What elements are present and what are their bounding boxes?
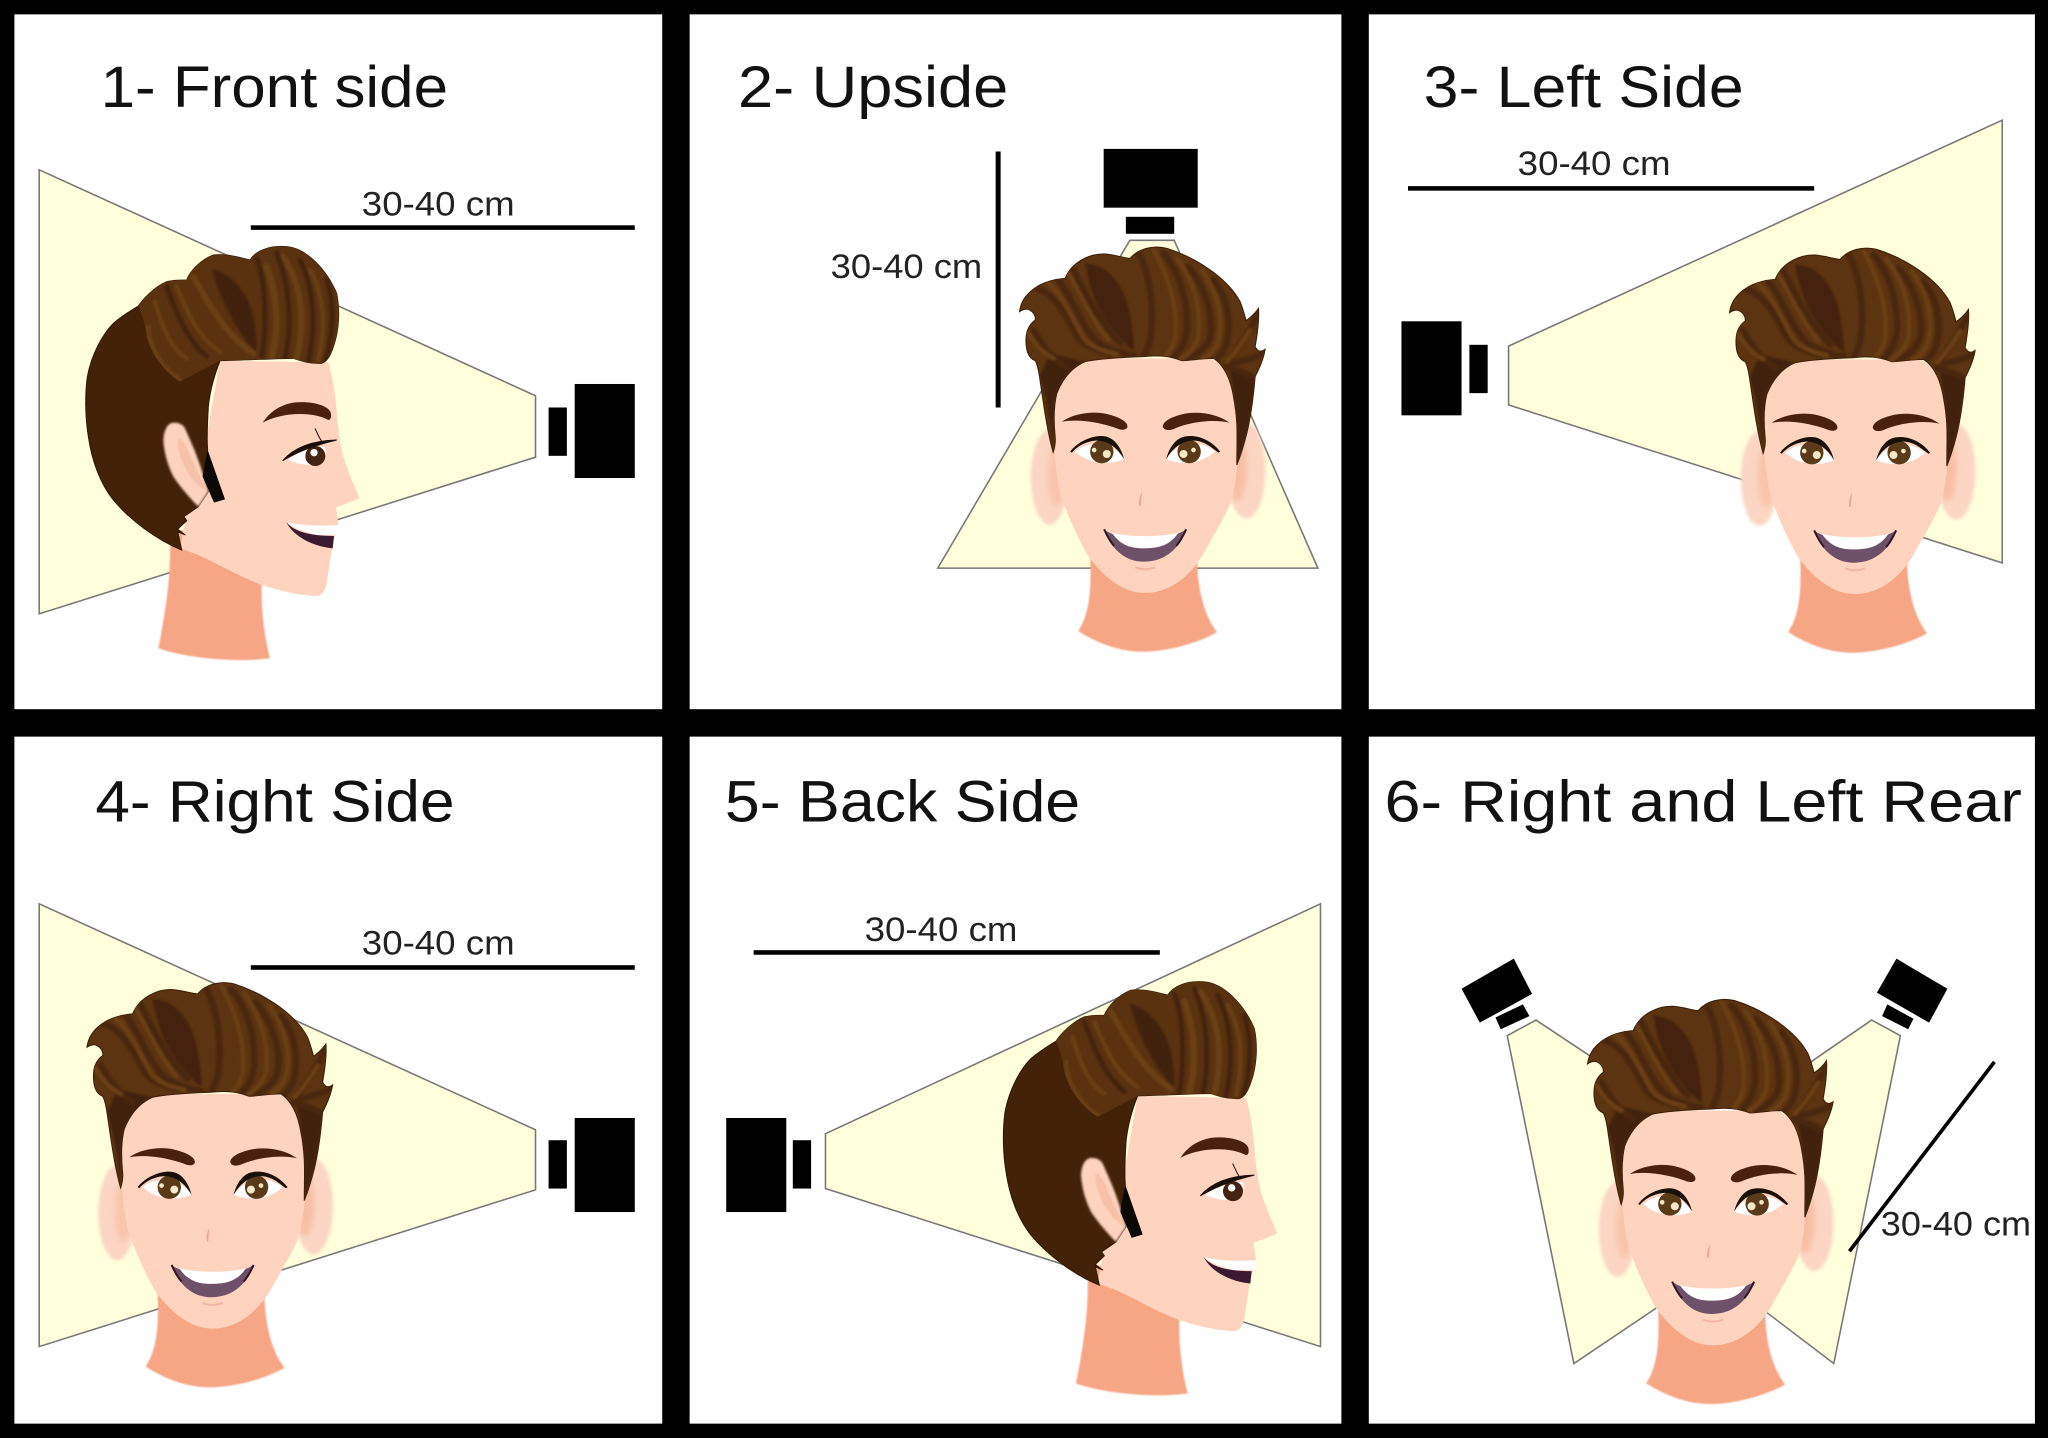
head front [1588,999,1833,1404]
head front [87,983,333,1387]
light beam [825,904,1320,1347]
panel: 5 back side [690,737,1341,1424]
distance line [996,152,1001,407]
light beam [938,240,1318,568]
head front [1729,248,1975,653]
camera [726,1118,811,1212]
distance label: 30-40 cm [831,248,982,286]
left camera [1462,959,1532,1029]
light beam [39,904,536,1347]
head profile [86,246,359,660]
camera [1104,149,1198,234]
distance label: 30-40 cm [1518,145,1671,183]
distance line [251,225,635,230]
panel: 1 front side [14,14,662,709]
panel: 4 right side [14,737,662,1424]
camera [549,384,635,478]
camera [549,1118,635,1212]
title: 1: 1- Front side [101,55,448,120]
distance label: 30-40 cm [362,925,515,963]
title: 3: 3- Left Side [1424,55,1744,120]
title: 5: 5- Back Side [725,770,1080,835]
camera [1401,321,1488,415]
distance label: 30-40 cm [362,186,515,224]
distance label: 30-40 cm [865,911,1017,949]
title: 2: 2- Upside [738,55,1008,120]
light beam [39,170,536,614]
head profile [1003,982,1277,1395]
title: 6: 6- Right and Left Rear [1384,770,2022,835]
right camera [1877,959,1947,1029]
panel: 3 left side [1369,14,2035,709]
head front [1019,247,1265,652]
left light beam [1507,1020,1698,1364]
panel: 2 upside [690,14,1341,709]
right light beam [1724,1020,1900,1364]
light beam [1509,120,2002,563]
distance line [1849,1062,1994,1251]
distance line [1408,186,1814,191]
distance line [251,965,635,970]
title: 4: 4- Right Side [95,770,455,835]
distance label: 30-40 cm [1881,1206,2031,1244]
panel: 6 right and left rear [1369,737,2035,1424]
distance line [754,950,1160,955]
